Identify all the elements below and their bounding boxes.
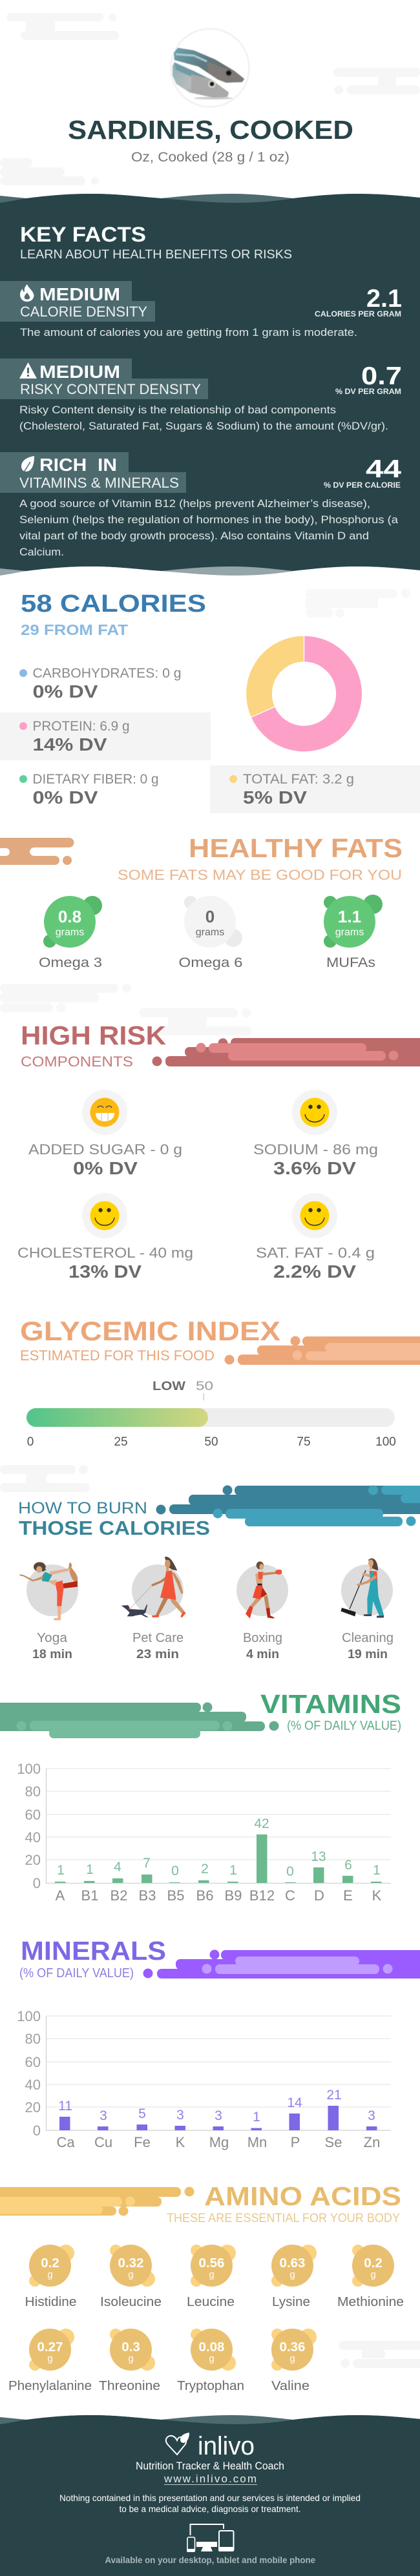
bar chart: minerals: Zn: [364, 2134, 380, 2150]
decorative blob: [152, 1038, 420, 1066]
added sugar: ADDED SUGAR - 0 g: [28, 1141, 182, 1158]
bar chart: minerals: Ca: [56, 2134, 75, 2150]
bar chart: vitamins: K: [372, 1887, 382, 1904]
omega 3: [39, 896, 102, 970]
amino: valine: Valine: [271, 2379, 310, 2393]
heading: VITAMINS: [260, 1689, 401, 1719]
omega 3: grams: [56, 927, 84, 938]
bar chart: vitamins: 13: [311, 1849, 326, 1864]
activity: yoga: 18 min: [32, 1648, 72, 1661]
bar chart: vitamins: 80: [25, 1783, 41, 1800]
subheading: THESE ARE ESSENTIAL FOR YOUR BODY: [167, 2211, 400, 2225]
icon: dog walking figure: [121, 1557, 186, 1617]
icon: boxer figure: [246, 1561, 282, 1619]
heading: calories: 58 CALORIES: [21, 590, 206, 618]
value: 2.1: [366, 285, 402, 313]
gauge label: LOW: [152, 1380, 185, 1393]
bar chart: vitamins: 4: [114, 1860, 121, 1875]
amino: methionine: 0.2: [364, 2256, 383, 2270]
activity: pet care: Pet Care: [132, 1631, 184, 1645]
bar chart: minerals: 3: [215, 2108, 222, 2123]
value: 0.7: [361, 362, 402, 390]
omega 6: grams: [196, 927, 224, 938]
saturated fat: 2.2% DV: [273, 1262, 356, 1282]
bar chart: vitamins: B6: [196, 1887, 213, 1904]
heading: GLYCEMIC INDEX: [20, 1316, 280, 1346]
unit: % DV PER GRAM: [335, 387, 401, 396]
wave bottom: [0, 566, 420, 585]
amino: methionine: Methionine: [337, 2295, 404, 2309]
activity: yoga: Yoga: [37, 1631, 68, 1645]
bar chart: minerals: Se: [325, 2134, 342, 2150]
icon: leaf: [21, 456, 34, 472]
heading: how to burn: HOW TO BURN: [18, 1499, 147, 1517]
unit: CALORIES PER GRAM: [315, 309, 401, 318]
disclaimer: Nothing contained in this presentation and our services is intended or implied: [59, 2493, 361, 2503]
bar chart: vitamins: 1: [229, 1863, 237, 1878]
gauge scale: 25: [114, 1435, 128, 1449]
amino: methionine: g: [370, 2269, 376, 2280]
amino: isoleucine: [100, 2245, 162, 2309]
added sugar: [28, 1090, 182, 1178]
rating: MEDIUM: [39, 362, 120, 382]
panel: healthy fats: [0, 833, 403, 970]
legend: dietary fiber: 0% DV: [32, 787, 98, 807]
rating: MEDIUM: [39, 284, 120, 304]
wave: [0, 2415, 420, 2576]
panel: high risk: [0, 984, 420, 1282]
amino: phenylalanine: 0.27: [37, 2340, 63, 2354]
icon: grinning face: [90, 1098, 119, 1127]
amino: valine: 0.36: [280, 2340, 305, 2354]
amino: leucine: Leucine: [187, 2295, 235, 2309]
activity: boxing: [236, 1561, 288, 1661]
label bands: [0, 358, 208, 399]
bar chart: minerals: P: [291, 2134, 300, 2150]
rating: RICH IN: [39, 455, 117, 475]
bar chart: minerals: 5: [138, 2106, 146, 2121]
description: Calcium.: [19, 546, 64, 558]
icon: smiling face: [300, 1098, 330, 1127]
amino: leucine: 0.56: [199, 2256, 224, 2270]
icon: smiling face: [300, 1201, 330, 1230]
panel: vitamins: [0, 1689, 401, 1904]
legend: total fat: 5% DV: [243, 787, 307, 807]
sodium: 3.6% DV: [273, 1158, 356, 1178]
heading: HIGH RISK: [21, 1021, 166, 1050]
amino: methionine: [337, 2245, 404, 2309]
amino: valine: g: [289, 2353, 295, 2364]
background cloud shapes: [0, 1465, 90, 1492]
wave top: [0, 194, 420, 581]
panel: key facts: [0, 194, 420, 585]
bar chart: minerals: Cu: [94, 2134, 112, 2150]
amino: phenylalanine: [8, 2329, 92, 2393]
legend: total fat: [210, 765, 420, 813]
availability note: Available on your desktop, tablet and mobile phone: [105, 2555, 315, 2565]
activity: cleaning: 19 min: [348, 1648, 388, 1661]
icon: devices: [187, 2524, 234, 2552]
bar chart: vitamins: A: [56, 1887, 65, 1904]
legend: dietary fiber: DIETARY FIBER: 0 g: [32, 772, 159, 787]
cholesterol: [17, 1193, 193, 1282]
bar chart: vitamins: 100: [17, 1761, 41, 1777]
panel: amino acids: [0, 2181, 420, 2393]
gauge scale: [27, 1435, 396, 1449]
description: Risky Content density is the relationship of bad components: [19, 404, 336, 416]
mufas: MUFAs: [326, 955, 375, 970]
omega 6: [178, 896, 243, 970]
bar chart: minerals: 0: [33, 2123, 41, 2139]
bar chart: vitamins: C: [285, 1887, 295, 1904]
bar chart: minerals: 60: [25, 2054, 41, 2070]
legend: protein: PROTEIN: 6.9 g: [32, 719, 129, 734]
decorative blob: [0, 838, 74, 865]
legend: protein: [0, 712, 211, 760]
saturated fat: [256, 1193, 375, 1282]
panel: minerals: [17, 1936, 420, 2150]
bar chart: vitamins: 60: [25, 1807, 41, 1823]
mufas: [324, 895, 383, 970]
website: www.inlivo.com: [163, 2473, 257, 2485]
gauge label: 50: [196, 1380, 213, 1393]
bar chart: vitamins: B12: [249, 1887, 275, 1904]
bar chart: vitamins: 0: [286, 1864, 294, 1879]
bar chart: vitamins: 7: [143, 1856, 151, 1871]
description: The amount of calories you are getting from 1 gram is moderate.: [20, 326, 357, 338]
label: RISKY CONTENT DENSITY: [20, 381, 201, 397]
amino: lysine: g: [289, 2269, 295, 2280]
subheading: SOME FATS MAY BE GOOD FOR YOU: [118, 867, 402, 883]
bar chart: minerals: 3: [176, 2108, 184, 2123]
icon: warning: [19, 362, 37, 379]
amino: threonine: g: [128, 2353, 134, 2364]
gauge scale: 0: [27, 1435, 34, 1449]
bar chart: vitamins: 2: [201, 1862, 209, 1876]
amino: threonine: [99, 2329, 160, 2393]
legend: total fat: TOTAL FAT: 3.2 g: [243, 772, 354, 787]
description: [19, 497, 399, 558]
saturated fat: SAT. FAT - 0.4 g: [256, 1245, 375, 1261]
amino: histidine: g: [47, 2269, 53, 2280]
bar chart: vitamins: 1: [86, 1862, 94, 1877]
decorative blob: [143, 1949, 420, 1979]
decorative blob: [225, 1336, 420, 1365]
logo wordmark: inlivo: [198, 2432, 255, 2460]
amino: threonine: 0.3: [121, 2340, 140, 2354]
amino: phenylalanine: g: [47, 2353, 53, 2364]
panel: footer: [0, 2415, 420, 2576]
icon: smiling face: [90, 1201, 119, 1230]
amino: tryptophan: 0.08: [199, 2340, 224, 2354]
panel: calories: [0, 589, 420, 813]
logo: heart with leaf: [166, 2433, 189, 2455]
bar chart: minerals: Fe: [134, 2134, 151, 2150]
fact: vitamins and minerals: [0, 452, 401, 558]
added sugar: 0% DV: [73, 1158, 138, 1178]
sodium: [253, 1090, 378, 1178]
description: (Cholesterol, Saturated Fat, Sugars & Sodium) to the amount (%DV/gr).: [19, 420, 388, 432]
bar chart: minerals: 3: [368, 2108, 375, 2123]
amino: leucine: g: [209, 2269, 215, 2280]
bar chart: vitamins: B2: [110, 1887, 127, 1904]
heading: AMINO ACIDS: [204, 2181, 401, 2211]
bar chart: minerals: 11: [58, 2099, 72, 2114]
amino: leucine: [187, 2245, 236, 2309]
icon: yoga figure: [20, 1562, 78, 1620]
amino: isoleucine: Isoleucine: [100, 2295, 162, 2309]
gauge scale: 50: [204, 1435, 218, 1449]
mufas: 1.1: [338, 907, 361, 926]
activity: cleaning: [341, 1558, 394, 1661]
sodium: SODIUM - 86 mg: [253, 1141, 378, 1158]
description: vital part of the body growth process). Also contains Vitamin D and: [19, 530, 369, 542]
bar chart: vitamins: D: [314, 1887, 324, 1904]
bar chart: minerals: 100: [17, 2008, 41, 2024]
bar chart: vitamins: 40: [25, 1829, 41, 1845]
chart: macro donut: [246, 636, 362, 752]
subheading: (% OF DAILY VALUE): [287, 1719, 401, 1733]
omega 3: Omega 3: [39, 955, 102, 970]
activity: pet care: 23 min: [136, 1648, 179, 1661]
amino: valine: [271, 2329, 317, 2393]
bar chart: vitamins: 1: [57, 1863, 65, 1878]
amino: threonine: Threonine: [99, 2379, 160, 2393]
omega 6: 0: [205, 907, 215, 926]
subheading: calories from fat: 29 FROM FAT: [21, 621, 128, 638]
activity: boxing: Boxing: [243, 1631, 282, 1645]
legend: carbohydrates: CARBOHYDRATES: 0 g: [32, 666, 181, 681]
cholesterol: 13% DV: [68, 1262, 142, 1282]
activity: cleaning: Cleaning: [342, 1631, 394, 1645]
label: CALORIE DENSITY: [20, 304, 147, 320]
gauge label: [152, 1380, 213, 1400]
legend: dietary fiber: [19, 772, 159, 807]
background cloud: [339, 2341, 420, 2368]
tagline: Nutrition Tracker & Health Coach: [136, 2460, 284, 2472]
amino: histidine: 0.2: [41, 2256, 59, 2270]
background cloud shapes: [0, 984, 252, 1035]
heading: key facts: KEY FACTS: [20, 223, 146, 246]
bar chart: vitamins: 6: [344, 1858, 352, 1873]
bar chart: vitamins: B9: [225, 1887, 242, 1904]
title: SARDINES, COOKED: [68, 115, 353, 145]
subheading: (% OF DAILY VALUE): [19, 1966, 134, 1980]
decorative blob: [0, 2187, 194, 2216]
bar chart: vitamins: 1: [373, 1863, 381, 1878]
bar chart: vitamins: B3: [139, 1887, 156, 1904]
bar chart: vitamins: 0: [171, 1864, 179, 1878]
bar chart: minerals: 21: [326, 2088, 342, 2103]
panel: glycemic index: [20, 1316, 420, 1449]
label: VITAMINS & MINERALS: [19, 475, 179, 491]
bar chart: minerals: 1: [253, 2110, 260, 2124]
gauge bar: [26, 1408, 395, 1427]
amino: tryptophan: [177, 2329, 244, 2393]
label bands: [0, 452, 186, 493]
heading: those calories: THOSE CALORIES: [19, 1517, 210, 1539]
bar chart: minerals: 80: [25, 2031, 41, 2047]
gauge scale: 100: [375, 1435, 396, 1449]
subheading: ESTIMATED FOR THIS FOOD: [20, 1347, 215, 1364]
disclaimer: to be a medical advice, diagnosis or treatment.: [119, 2504, 301, 2514]
icon: cleaner figure: [341, 1558, 384, 1618]
amino: tryptophan: Tryptophan: [177, 2379, 244, 2393]
description: A good source of Vitamin B12 (helps prevent Alzheimer’s disease),: [19, 497, 370, 510]
bar chart: minerals: 40: [25, 2077, 41, 2093]
decorative blob: [0, 1703, 279, 1738]
disclaimer: [59, 2493, 361, 2514]
panel: header: [0, 13, 420, 185]
bar chart: minerals: Mn: [247, 2134, 267, 2150]
label bands: [0, 281, 155, 322]
cholesterol: CHOLESTEROL - 40 mg: [17, 1245, 193, 1261]
amino: lysine: Lysine: [272, 2295, 310, 2309]
description: Selenium (helps the regulation of hormones in the body), Phosphorus (a: [19, 514, 399, 526]
bar chart: vitamins: E: [343, 1887, 353, 1904]
bar chart: vitamins: 20: [25, 1852, 41, 1868]
amino: isoleucine: 0.32: [118, 2256, 143, 2270]
amino: histidine: [25, 2245, 76, 2309]
subheading: LEARN ABOUT HEALTH BENEFITS OR RISKS: [20, 248, 292, 262]
fact: risky content density: [0, 358, 402, 432]
ring around food image: [171, 28, 249, 107]
fact: calorie density: [0, 281, 402, 338]
legend: carbohydrates: [19, 666, 181, 701]
background cloud shapes: [306, 589, 410, 618]
amino: phenylalanine: Phenylalanine: [8, 2379, 92, 2393]
unit: % DV PER CALORIE: [324, 481, 401, 490]
heading: HEALTHY FATS: [189, 833, 403, 863]
bar chart: minerals: [17, 2008, 391, 2150]
panel: how to burn those calories: [0, 1465, 420, 1661]
bar chart: vitamins: 0: [33, 1875, 41, 1891]
bar chart: minerals: K: [176, 2134, 185, 2150]
amino: histidine: Histidine: [25, 2295, 76, 2309]
description: [19, 404, 388, 432]
activity: yoga: [20, 1562, 78, 1661]
amino: lysine: 0.63: [280, 2256, 305, 2270]
bar chart: minerals: 14: [287, 2095, 302, 2110]
legend: protein: 14% DV: [32, 734, 107, 754]
activity: boxing: 4 min: [246, 1648, 279, 1661]
heading: MINERALS: [21, 1936, 166, 1966]
amino: tryptophan: g: [209, 2353, 215, 2364]
bar chart: vitamins: [17, 1761, 391, 1904]
subtitle: Oz, Cooked (28 g / 1 oz): [131, 150, 289, 165]
legend: carbohydrates: 0% DV: [32, 681, 98, 701]
icon: flame: [20, 284, 34, 302]
subheading: COMPONENTS: [21, 1054, 133, 1070]
bar chart: vitamins: 42: [254, 1816, 269, 1831]
value: 44: [366, 455, 401, 483]
gauge scale: 75: [297, 1435, 311, 1449]
bar chart: minerals: Mg: [209, 2134, 229, 2150]
mufas: grams: [335, 927, 364, 938]
activity: pet care: [121, 1557, 186, 1661]
icon: sardines: [173, 48, 244, 99]
amino: lysine: [271, 2245, 317, 2309]
bar chart: minerals: 20: [25, 2099, 41, 2115]
decorative blob: [156, 1486, 420, 1526]
background cloud shapes: [0, 13, 420, 185]
bar chart: minerals: 3: [100, 2108, 107, 2123]
omega 3: 0.8: [58, 907, 81, 926]
bar chart: vitamins: B5: [167, 1887, 184, 1904]
omega 6: Omega 6: [178, 955, 243, 970]
amino: isoleucine: g: [128, 2269, 134, 2280]
bar chart: vitamins: B1: [81, 1887, 98, 1904]
